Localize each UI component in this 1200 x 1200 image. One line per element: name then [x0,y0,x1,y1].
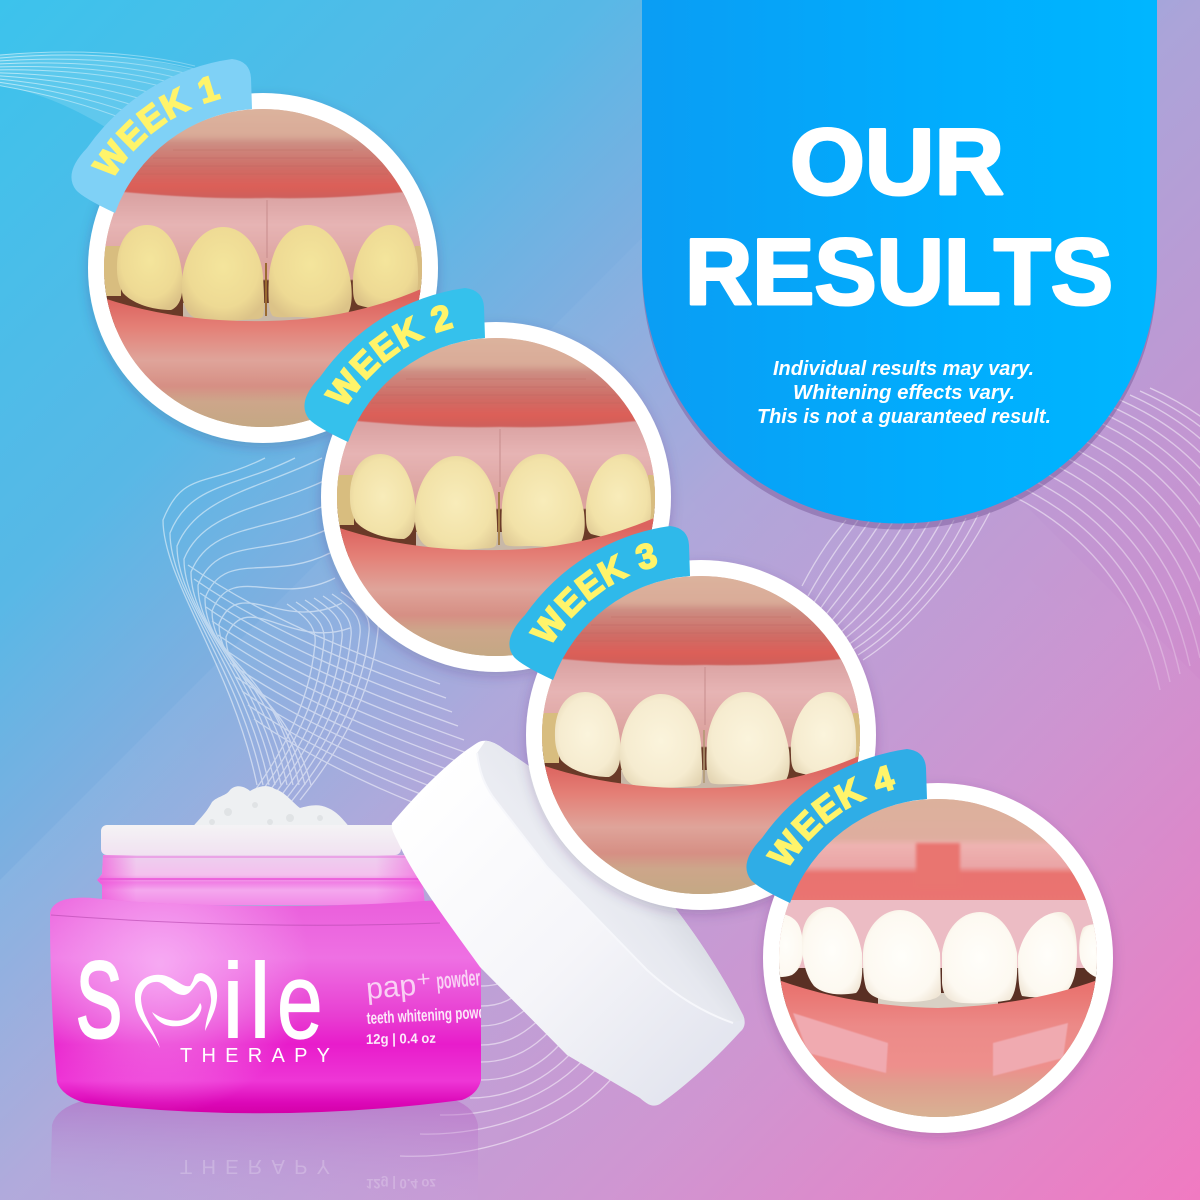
jar neck [97,855,425,905]
disclaimer: Whitening effects vary. [793,382,1015,404]
logo Therapy: THERAPY [180,1045,330,1067]
jar reflection: THERAPY [180,1155,330,1177]
jar lid [392,740,745,1106]
logo wordmark il: il [221,940,275,1061]
week 2 teeth photo [331,337,661,662]
product description: teeth whitening powder [366,1002,497,1028]
week 3 circle [509,526,880,918]
heading: OUR [790,109,1004,214]
powder [190,786,352,830]
week 3 label [509,526,690,680]
week 3 teeth photo [536,575,866,900]
week 1 teeth photo [98,108,428,433]
heading [685,109,1113,324]
logo tooth [135,973,217,1048]
disclaimer: This is not a guaranteed result. [757,406,1051,428]
week 4 teeth photo [768,798,1108,1123]
week 2 circle [304,288,676,680]
disclaimer [757,358,1051,428]
week 1 label: WEEK 1 [90,76,222,176]
wave lines: right arcs [1000,388,1200,690]
jar body [50,898,481,1113]
jar [50,786,497,1113]
disclaimer: Individual results may vary. [773,358,1034,380]
title panel [642,0,1157,530]
logo wordmark e: e [277,941,323,1062]
jar reflection: 12g | 0.4 oz [366,1176,436,1192]
product name powder: powder [435,964,481,994]
product name pap: pap⁺ [365,967,433,1006]
logo Smile Therapy [78,960,481,1062]
heading: RESULTS [685,219,1113,324]
jar rim [101,825,401,855]
week 1 label [72,59,252,213]
wave lines: arcs below lid [400,970,625,1156]
week 4 circle [746,749,1116,1140]
wave lines: top left [0,52,200,141]
week 2 label [304,288,485,442]
week 1 circle [72,59,443,452]
jar body highlight [50,898,481,1113]
week 3 label: WEEK 3 [528,543,658,643]
wave lines: ribbon under panel [802,512,990,660]
product weight: 12g | 0.4 oz [366,1030,436,1047]
logo wordmark S: S [76,941,122,1061]
week 4 label: WEEK 4 [766,764,896,866]
jar reflection [50,1100,478,1200]
week 4 label [746,749,927,903]
wave lines: central mesh [163,458,506,838]
week 2 label: WEEK 2 [324,305,454,405]
